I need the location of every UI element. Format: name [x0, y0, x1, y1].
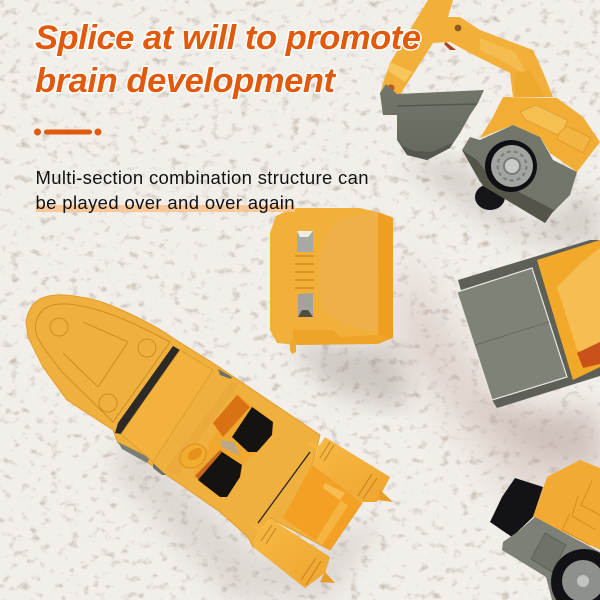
- black seat front: [198, 452, 242, 497]
- truck yellow body: [533, 460, 600, 550]
- truck module base: [458, 240, 600, 408]
- title line 2: brain development: [35, 62, 336, 100]
- bow deck lines: [35, 304, 170, 422]
- cockpit opening: [193, 393, 273, 497]
- highlight underline: [36, 205, 295, 212]
- truck black coupler: [490, 478, 543, 537]
- title line 1: Splice at will to promote: [35, 19, 421, 57]
- truck grey chassis: [502, 517, 600, 600]
- description text: [36, 167, 368, 213]
- rear well: [283, 465, 362, 550]
- side window strips: [118, 442, 150, 463]
- window top: [297, 231, 313, 252]
- windshield: [115, 346, 180, 434]
- cab module dome: [318, 212, 378, 333]
- grey panel: [457, 268, 567, 400]
- cab module body: [270, 208, 393, 345]
- excavator arm: [380, 0, 553, 97]
- truck module shadow: [465, 400, 600, 470]
- excavator bucket: [380, 84, 484, 160]
- description line 2: be played over and over again: [36, 192, 294, 213]
- accent divider: [34, 128, 102, 136]
- dashboard bar: [165, 383, 240, 477]
- cab hook: [290, 340, 296, 354]
- cabin roof: [121, 350, 213, 462]
- truck wheel: [551, 549, 600, 600]
- excavator toy: [380, 0, 600, 223]
- gear lever: [220, 440, 240, 456]
- cab module toy: [270, 208, 410, 410]
- boat toy: [26, 295, 393, 588]
- engine top: [307, 437, 393, 502]
- excavator cab: [480, 97, 600, 172]
- steering wheel: [175, 439, 211, 473]
- boat hull: [26, 295, 362, 550]
- grille ribs: [295, 256, 314, 288]
- excavator chassis: [462, 125, 577, 223]
- dump truck module: [457, 240, 600, 470]
- description line 1: Multi-section combination structure can: [36, 167, 368, 188]
- cab module shadow: [290, 345, 410, 410]
- rear deck divider: [258, 452, 310, 523]
- window bottom: [298, 293, 313, 317]
- black seat back: [232, 407, 273, 452]
- engine bottom: [248, 518, 335, 588]
- yellow dump bed: [537, 240, 600, 380]
- title: [35, 19, 421, 100]
- truck front corner: [490, 460, 600, 600]
